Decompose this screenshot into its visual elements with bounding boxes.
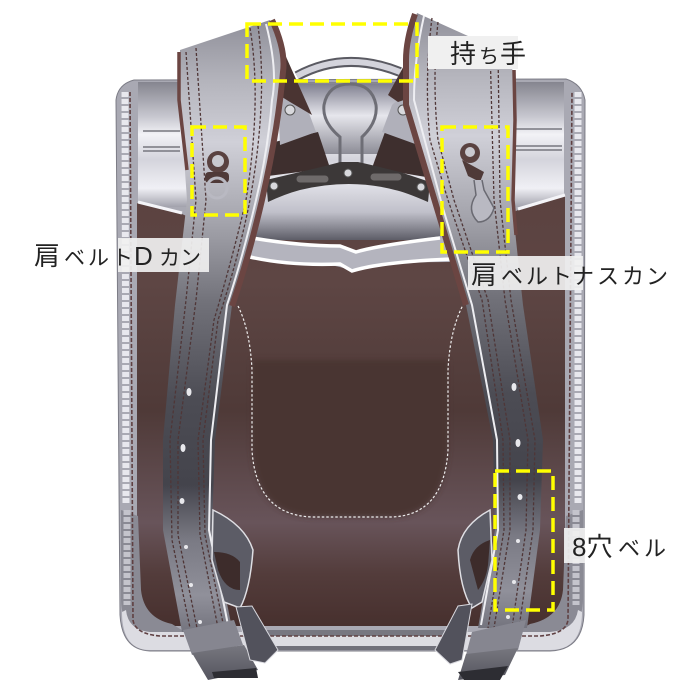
- label: shoulder belt D-ring: ベルト: [64, 247, 133, 270]
- scalloped piping white: [250, 238, 452, 271]
- label: 8-hole belt: ベル: [618, 536, 666, 561]
- lower mottling right: [572, 510, 580, 605]
- strap end: [458, 666, 508, 680]
- label: shoulder belt snap hook: 肩: [471, 260, 497, 290]
- label: shoulder belt snap hook: [468, 256, 668, 290]
- randoseru body: [116, 79, 585, 651]
- white edge line: [414, 16, 498, 625]
- keeper bands: [183, 620, 243, 655]
- lower right buckle: [435, 510, 526, 680]
- label: shoulder belt D-ring: 肩: [34, 241, 60, 271]
- maroon inner edge: [232, 20, 284, 306]
- strap stitches: [170, 26, 262, 628]
- punched holes: [180, 388, 202, 624]
- label: handle: [428, 36, 526, 69]
- tail strap: [236, 606, 278, 663]
- D ring hardware: [205, 151, 229, 198]
- dark curved bar: [266, 162, 430, 202]
- under-strap shadow: [388, 60, 407, 102]
- bar grips: [300, 177, 398, 179]
- side tab: [212, 510, 253, 608]
- tail strap: [435, 604, 472, 664]
- label: shoulder belt D-ring: D: [134, 241, 153, 271]
- hinge plate left: [278, 99, 316, 145]
- label: 8-hole belt: [564, 528, 666, 563]
- left shoulder strap: [163, 20, 312, 632]
- right shoulder strap: [388, 13, 543, 628]
- side strip left mottling: [125, 92, 126, 505]
- flap seam lines right: [515, 129, 562, 150]
- snap hook hardware: [460, 143, 494, 222]
- maroon outer edge: [179, 52, 187, 170]
- back pad shade: [252, 360, 448, 517]
- label: handle: 手: [500, 39, 526, 69]
- dark bracket right: [372, 132, 432, 178]
- white edge line: [209, 24, 274, 625]
- rivets: [270, 105, 425, 191]
- scalloped piping silver: [250, 236, 450, 271]
- handle mechanism: [250, 62, 452, 271]
- slot: [214, 552, 240, 590]
- lower corner right: [515, 510, 583, 632]
- handle arc: [297, 62, 400, 76]
- maroon inner edge: [406, 14, 466, 305]
- punched holes: [506, 383, 522, 619]
- silver plate: [255, 178, 445, 240]
- label: shoulder belt D-ring: カン: [159, 247, 201, 270]
- keeper bands: [466, 620, 526, 655]
- label: shoulder belt D-ring: [34, 238, 209, 272]
- side strip right mottling: [574, 92, 582, 505]
- flap silver top: [138, 82, 564, 207]
- label: handle: 持: [450, 39, 476, 69]
- label: 8-hole belt: 8穴: [572, 532, 612, 562]
- metal ring: [324, 84, 376, 165]
- dark bracket left: [268, 132, 330, 176]
- pad dotted stitch: [238, 305, 463, 517]
- slot: [470, 540, 490, 590]
- white piping right: [518, 195, 565, 209]
- side tab: [458, 510, 492, 608]
- callout box: snap hook: [442, 127, 508, 252]
- upper silver block: [282, 84, 412, 154]
- lower mottling left: [124, 510, 130, 605]
- maroon outer edge: [513, 70, 516, 235]
- callout box: D-ring: [192, 127, 245, 215]
- hinge plate right: [382, 99, 418, 145]
- side stitches: [130, 92, 572, 636]
- label: handle: ち: [479, 46, 499, 68]
- lower corner left: [121, 510, 185, 632]
- body silhouette: [116, 79, 585, 651]
- bottom rail: [122, 610, 582, 650]
- brown back panel: [137, 196, 565, 626]
- strap face: [405, 13, 543, 628]
- callout box: handle: [247, 24, 417, 81]
- strap stitches: [427, 18, 535, 628]
- white piping left: [138, 202, 182, 213]
- under-strap shadow: [274, 50, 312, 115]
- strap face: [163, 20, 281, 632]
- lower left buckle: [183, 510, 278, 680]
- strap end: [212, 668, 258, 678]
- label: shoulder belt snap hook: ベルトナスカン: [501, 264, 668, 289]
- callout box: 8-hole belt: [495, 471, 553, 610]
- flap seam lines left: [143, 131, 180, 151]
